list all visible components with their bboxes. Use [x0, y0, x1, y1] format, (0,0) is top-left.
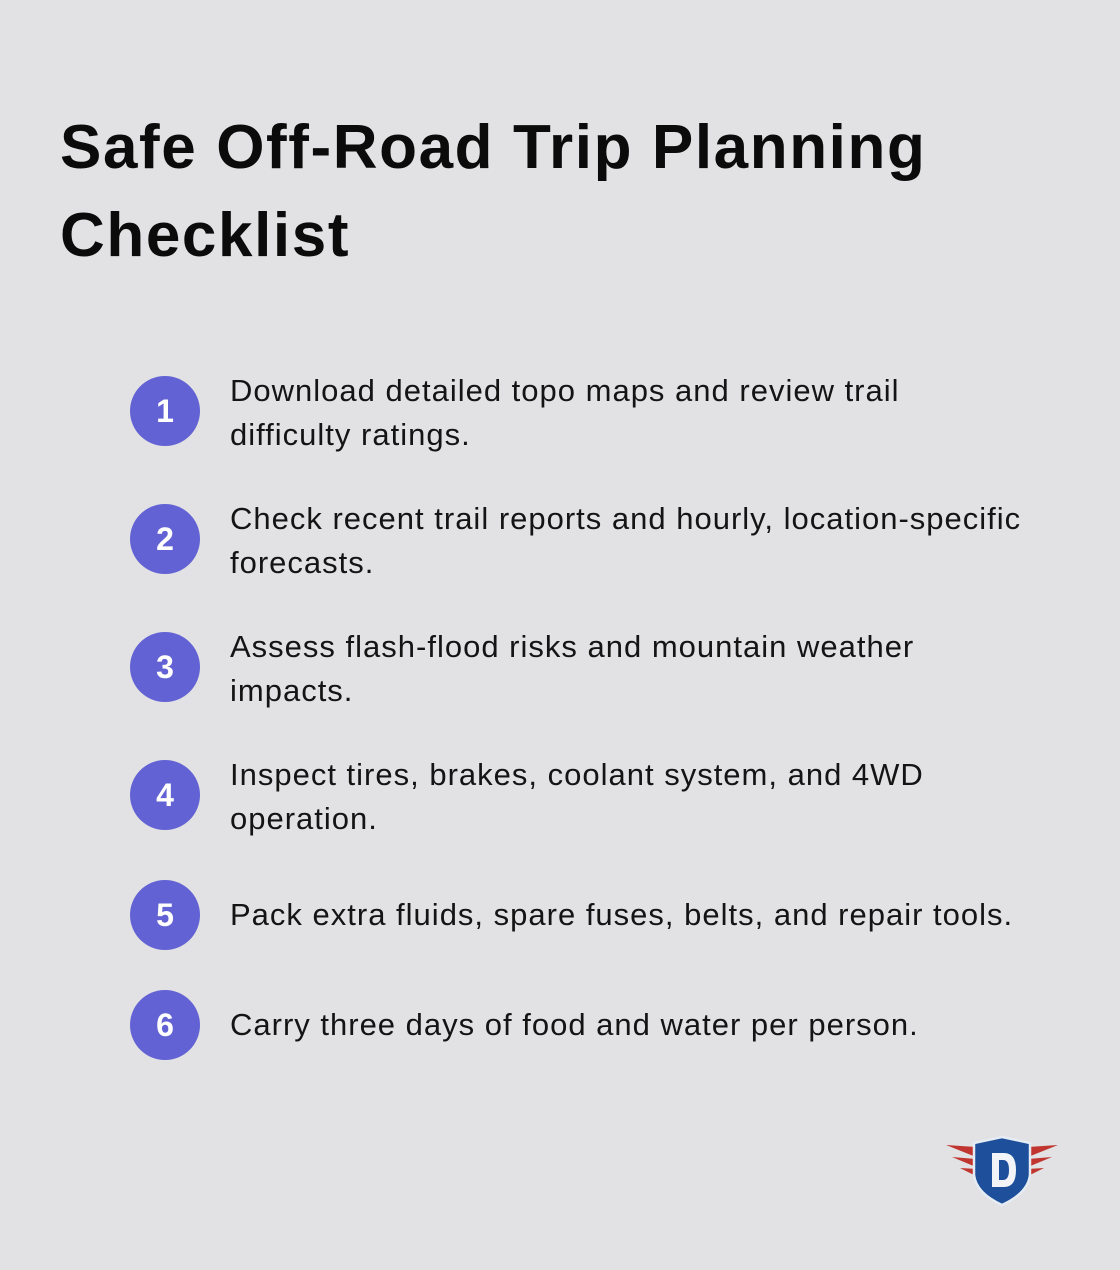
item 2: Check recent trail reports and hourly, location-specific: [230, 501, 1021, 536]
item 4: Inspect tires, brakes, coolant system, and 4WD: [230, 757, 924, 792]
item 6: Carry three days of food and water per person.: [230, 1007, 919, 1042]
item 1: difficulty ratings.: [230, 417, 471, 452]
item 4: 4: [156, 777, 174, 813]
logo: [946, 1136, 1058, 1206]
item 5: [130, 880, 1013, 950]
item 6: [130, 990, 919, 1060]
item 6: 6: [156, 1007, 174, 1043]
item 2: [130, 501, 1021, 580]
item 5: 5: [156, 897, 174, 933]
item 1: Download detailed topo maps and review trail: [230, 373, 900, 408]
item 3: 3: [156, 649, 174, 685]
item 5: Pack extra fluids, spare fuses, belts, and repair tools.: [230, 897, 1013, 932]
item 1: 1: [156, 393, 174, 429]
item 3: [130, 629, 914, 708]
item 2: forecasts.: [230, 545, 374, 580]
item 1: [130, 373, 900, 452]
title: Safe Off-Road Trip Planning: [60, 113, 926, 182]
item 3: impacts.: [230, 673, 353, 708]
item 4: operation.: [230, 801, 378, 836]
item 4: [130, 757, 924, 836]
title: [60, 113, 926, 270]
item 2: 2: [156, 521, 174, 557]
title: Checklist: [60, 201, 350, 270]
item 3: Assess flash-flood risks and mountain weather: [230, 629, 914, 664]
